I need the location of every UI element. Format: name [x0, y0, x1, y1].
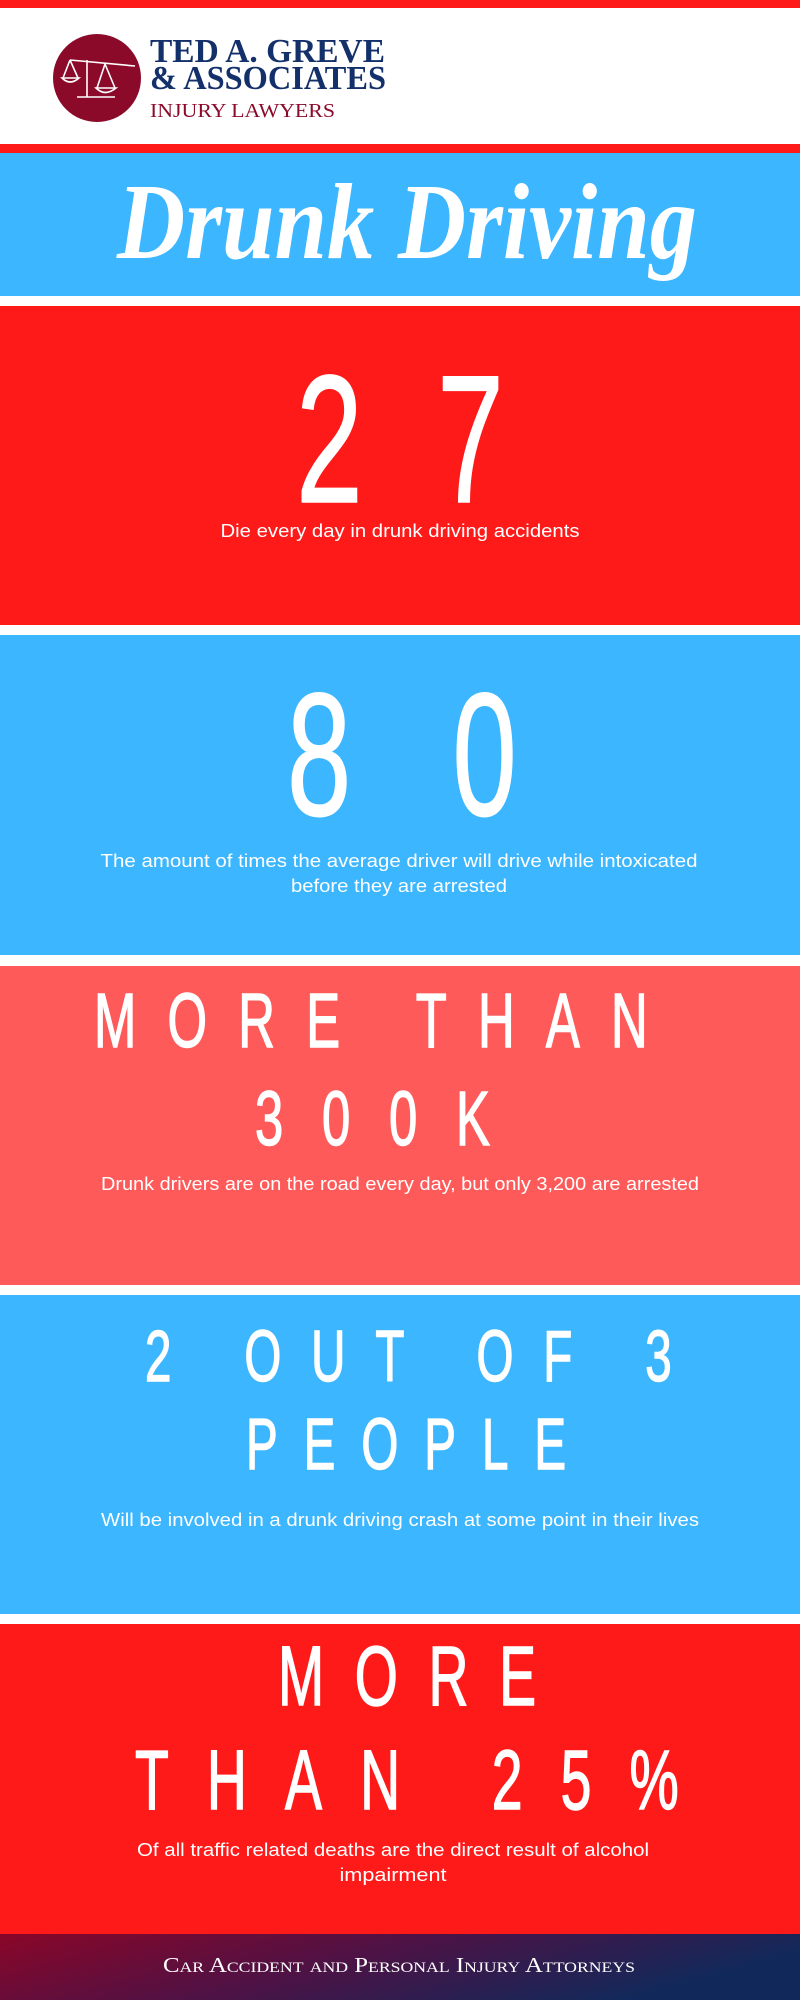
caption: Drunk drivers are on the road every day, but only 3,200 are arrested — [101, 1174, 699, 1194]
stat: more than 25%: THAN 25% — [135, 1735, 679, 1828]
caption: The amount of times the average driver will drive while intoxicated — [100, 851, 698, 871]
stat: 2 out of 3 people: PEOPLE — [246, 1404, 566, 1484]
logo text: TED A. GREVE — [150, 33, 385, 70]
title text: Drunk Driving — [116, 163, 697, 282]
panel: more than 25% — [0, 1624, 800, 1934]
stat: 2 out of 3 people: 2 OUT OF 3 — [145, 1316, 672, 1396]
stat: more than 300K: 300K — [255, 1075, 490, 1162]
stat: more than 25% — [135, 1631, 679, 1828]
panel: 300K drunk drivers — [0, 966, 800, 1285]
caption: before they are arrested — [291, 876, 507, 896]
caption: Die every day in drunk driving accidents — [220, 521, 580, 541]
panel: 27 deaths — [0, 306, 800, 625]
logo text: & ASSOCIATES — [150, 60, 386, 97]
stat: 80: 8 0 — [287, 658, 517, 853]
panel: 2 out of 3 people — [0, 1295, 800, 1614]
stat: 2 out of 3 people — [145, 1316, 672, 1484]
stat: more than 25%: MORE — [278, 1631, 536, 1724]
logo text: INJURY LAWYERS — [150, 100, 335, 122]
stat: more than 300K: MORE THAN — [94, 977, 648, 1064]
caption: impairment — [340, 1865, 446, 1885]
caption — [100, 851, 698, 896]
logo text — [150, 33, 386, 122]
icon: scales of justice emblem — [53, 34, 141, 122]
caption: Will be involved in a drunk driving crash at some point in their lives — [101, 1510, 699, 1530]
title banner — [0, 153, 800, 296]
footer tagline: Car Accident and Personal Injury Attorneys — [163, 1953, 635, 1977]
stat: more than 300K — [94, 977, 648, 1162]
panel: 80 times — [0, 635, 800, 955]
stat: 27: 2 7 — [296, 337, 504, 541]
caption: Of all traffic related deaths are the direct result of alcohol — [137, 1840, 649, 1860]
footer — [0, 1934, 800, 2000]
header: logo — [53, 33, 386, 122]
caption — [137, 1840, 649, 1885]
